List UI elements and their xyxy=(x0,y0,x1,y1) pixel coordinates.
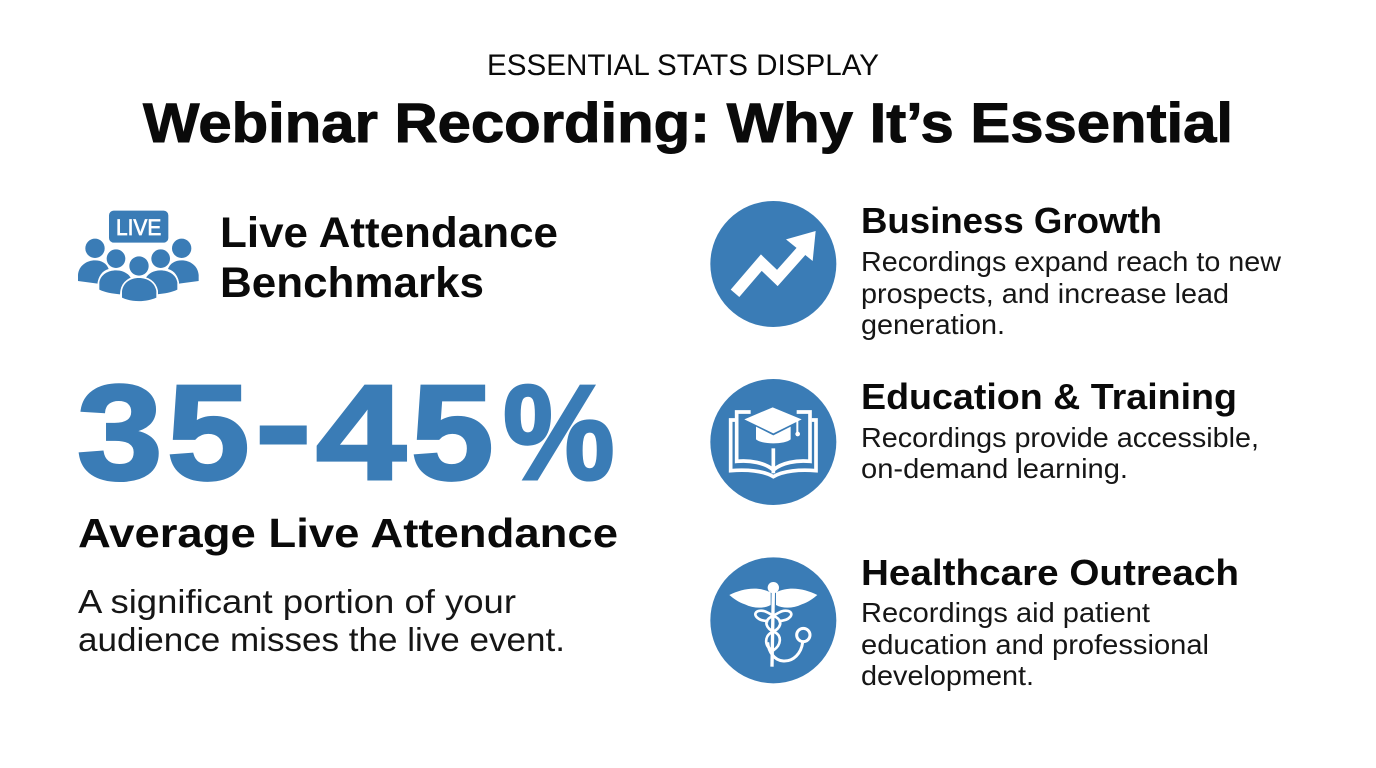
stat label: Average Live Attendance xyxy=(78,510,618,556)
icon: book and graduation cap xyxy=(710,379,836,505)
icon: live audience: LIVE xyxy=(116,215,161,240)
text: business growth description: Recordings expand reach to new xyxy=(861,246,1282,277)
text: healthcare description: development. xyxy=(861,660,1034,691)
text: business growth description: prospects, and increase lead xyxy=(861,278,1229,309)
text: business growth description xyxy=(861,246,1282,340)
big stat xyxy=(77,348,615,508)
icon: growth arrow xyxy=(710,201,836,327)
big stat: 5 xyxy=(411,358,494,508)
stat description: A significant portion of your xyxy=(78,583,516,620)
heading: education and training: Education & Training xyxy=(861,376,1237,417)
panel: education and training xyxy=(710,376,1259,505)
heading: business growth: Business Growth xyxy=(861,200,1162,241)
big stat: % xyxy=(503,357,615,508)
panel: business growth xyxy=(710,200,1282,340)
text: business growth description: generation. xyxy=(861,309,1005,340)
big stat: 5 xyxy=(167,358,250,508)
big stat: - xyxy=(255,348,312,499)
icon: caduceus with stethoscope xyxy=(710,557,836,683)
title: Webinar Recording: Why It’s Essential xyxy=(143,91,1233,154)
big stat: 4 xyxy=(316,357,406,508)
heading: live attendance benchmarks xyxy=(220,209,558,307)
heading: healthcare outreach: Healthcare Outreach xyxy=(861,552,1239,593)
text: healthcare description: Recordings aid patient xyxy=(861,597,1150,628)
text: healthcare description xyxy=(861,597,1209,691)
text: education description: on-demand learning. xyxy=(861,453,1128,484)
stat description xyxy=(78,583,565,658)
text: education description xyxy=(861,422,1259,484)
icon: live audience xyxy=(78,211,199,301)
text: education description: Recordings provide accessible, xyxy=(861,422,1259,453)
heading: live attendance benchmarks: Benchmarks xyxy=(220,259,484,307)
text: healthcare description: education and professional xyxy=(861,629,1209,660)
big stat: 3 xyxy=(77,357,163,508)
panel: live attendance xyxy=(77,209,618,658)
stat description: audience misses the live event. xyxy=(78,621,565,658)
heading: live attendance benchmarks: Live Attendance xyxy=(220,209,558,257)
panel: healthcare outreach xyxy=(710,552,1239,691)
eyebrow heading: ESSENTIAL STATS DISPLAY xyxy=(487,49,879,82)
